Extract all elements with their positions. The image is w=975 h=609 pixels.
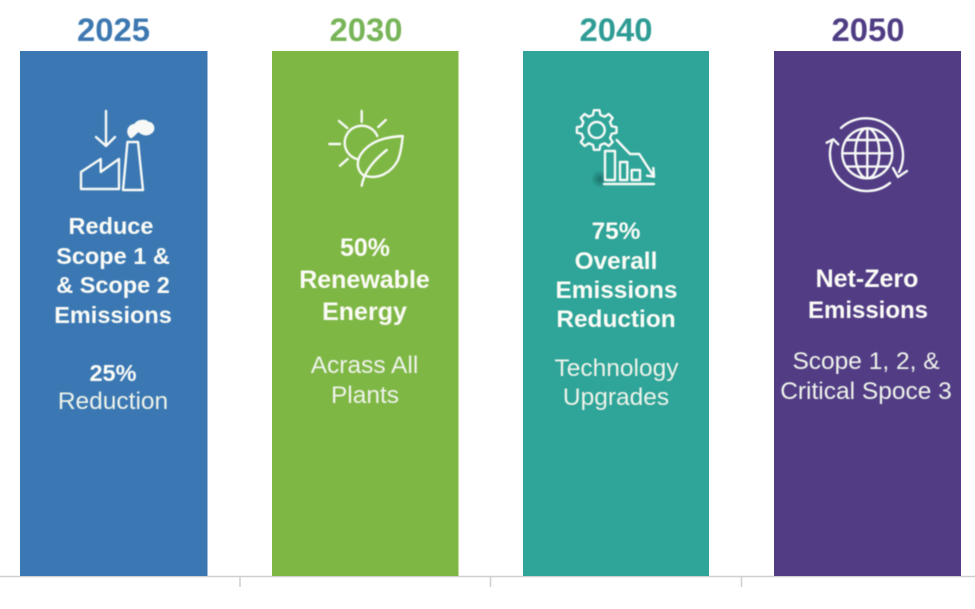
text: 2025 goal: Reduce [69, 213, 153, 239]
icon: gear and falling bar chart [577, 110, 654, 188]
text: 2050 goal: Net-Zero [816, 265, 918, 293]
text: 2050 goal [780, 265, 952, 405]
year heading 2050: 2050 [832, 11, 904, 48]
icon: factory with down arrow and smoke [81, 111, 153, 190]
icon: sun and leaf [329, 111, 403, 186]
text: 2050 goal: Emissions [808, 297, 928, 324]
text: 2030 goal [299, 234, 430, 409]
text: 2040 goal: Emissions [555, 277, 678, 304]
text: 2050 goal: Scope 1, 2, & [792, 348, 940, 375]
text: 2040 goal: Reduction [556, 306, 676, 333]
text: 2040 goal: Overall [575, 248, 657, 275]
text: 2030 goal: Renewable [299, 266, 430, 294]
text: 2030 goal: Energy [322, 298, 407, 326]
year heading 2040: 2040 [580, 11, 652, 48]
column 2025 [20, 51, 208, 576]
text: 2025 goal: & Scope 2 [56, 272, 170, 298]
panel: 2050 [774, 11, 961, 576]
column 2040 [523, 51, 709, 576]
text: 2025 goal: Reduction [58, 388, 168, 415]
column 2030 [272, 51, 458, 576]
column 2050 [774, 51, 961, 576]
text: 2030 goal: Plants [331, 382, 399, 409]
text: 2040 goal: Upgrades [563, 384, 669, 411]
timeline axis [0, 576, 975, 587]
text: 2040 goal: 75% [592, 218, 641, 245]
text: 2025 goal: Scope 1 & [56, 243, 170, 269]
year heading 2030: 2030 [330, 11, 402, 48]
text: 2025 goal: 25% [89, 360, 137, 386]
panel: 2025 [20, 11, 208, 576]
text: 2025 goal [54, 213, 172, 415]
year heading 2025: 2025 [77, 11, 150, 48]
panel: 2040 [523, 11, 709, 576]
text: 2040 goal: Technology [555, 355, 679, 382]
text: 2030 goal: Acrass All [311, 352, 418, 379]
text: 2030 goal: 50% [340, 234, 390, 262]
icon: globe with circular arrows [827, 118, 907, 191]
text: 2025 goal: Emissions [54, 302, 172, 328]
text: 2050 goal: Critical Spoce 3 [780, 378, 952, 405]
text: 2040 goal [555, 218, 679, 411]
panel: 2030 [272, 11, 458, 576]
